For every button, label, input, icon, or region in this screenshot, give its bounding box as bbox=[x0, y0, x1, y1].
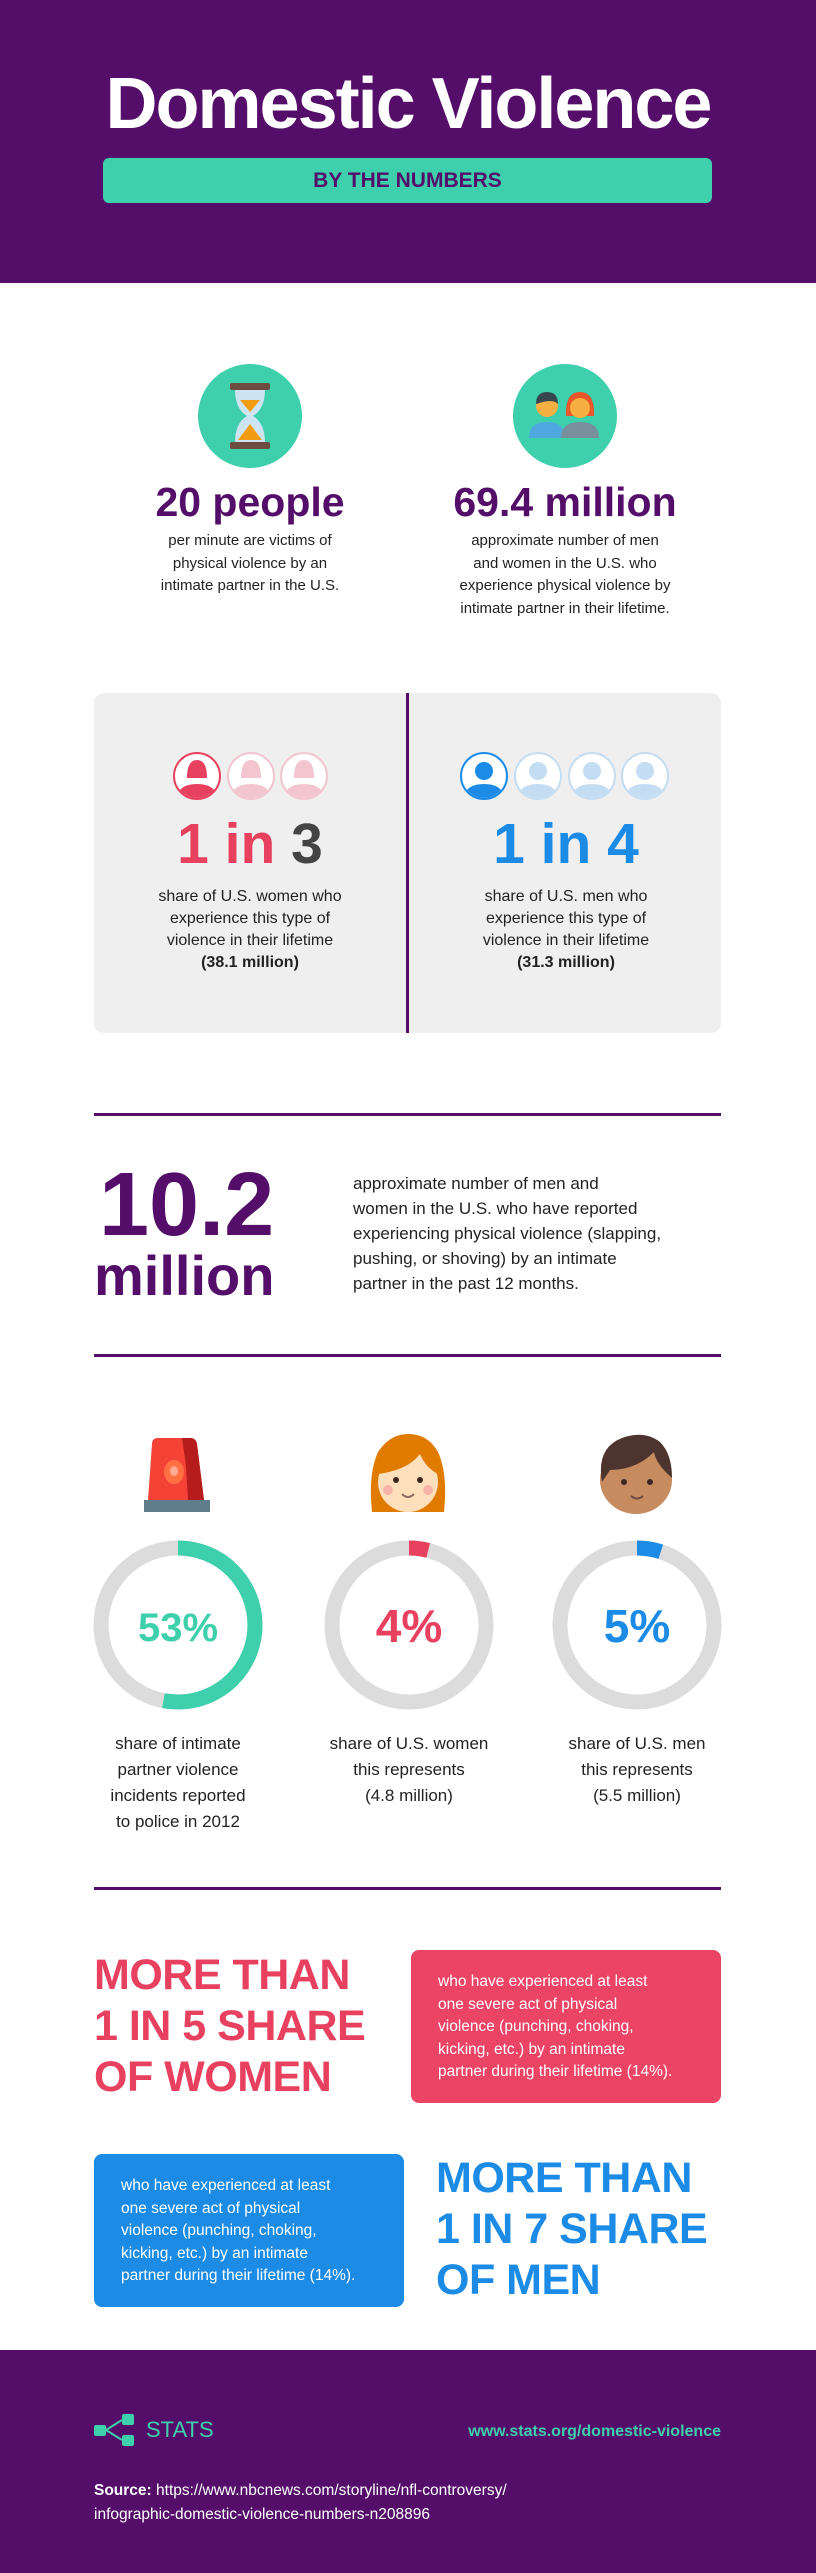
caption: 4%: share of U.S. women bbox=[330, 1734, 488, 1753]
header bbox=[0, 0, 816, 283]
logo: STATS bbox=[146, 2417, 214, 2442]
box: women: who have experienced at least bbox=[438, 1973, 647, 1990]
icons: women bbox=[173, 752, 328, 800]
big stat: 10.2 million: 10.2 bbox=[99, 1155, 274, 1255]
caption: 4%: (4.8 million) bbox=[365, 1786, 453, 1805]
stat: 20 people: intimate partner in the U.S. bbox=[161, 577, 339, 594]
caption: 53%: partner violence bbox=[118, 1760, 238, 1779]
source bbox=[94, 2482, 507, 2523]
box: women: violence (punching, choking, bbox=[438, 2018, 634, 2035]
big stat: 10.2 million bbox=[94, 1155, 274, 1307]
heading: men: MORE THAN bbox=[436, 2154, 692, 2202]
heading: men bbox=[436, 2154, 707, 2304]
url: www.stats.org/domestic-violence bbox=[468, 2423, 721, 2440]
stat: 20 people: per minute are victims of bbox=[168, 532, 332, 549]
women stat: share of U.S. women who bbox=[158, 888, 342, 905]
paragraph: 10.2 million bbox=[353, 1174, 661, 1293]
caption: 4%: this represents bbox=[353, 1760, 465, 1779]
donut: 5%: 5% bbox=[604, 1600, 670, 1652]
title: Domestic Violence bbox=[106, 64, 710, 144]
icon: man face bbox=[600, 1434, 672, 1514]
caption: 5%: this represents bbox=[581, 1760, 693, 1779]
source: infographic-domestic-violence-numbers-n208896 bbox=[94, 2506, 430, 2523]
caption: 5%: share of U.S. men bbox=[568, 1734, 706, 1753]
caption: 53%: incidents reported bbox=[110, 1786, 246, 1805]
logo bbox=[94, 2414, 214, 2446]
donut: 53% bbox=[94, 1540, 262, 1710]
men stat: 1 in 4 bbox=[493, 812, 639, 876]
stat: 20 people bbox=[155, 479, 345, 594]
box: women bbox=[411, 1950, 721, 2103]
women stat: experience this type of bbox=[170, 910, 330, 927]
paragraph: 10.2 million: experiencing physical violence (slapping, bbox=[353, 1224, 661, 1243]
box: men bbox=[94, 2154, 404, 2307]
stat: 69.4 million: approximate number of men bbox=[471, 532, 659, 549]
paragraph: 10.2 million: approximate number of men and bbox=[353, 1174, 599, 1193]
heading: women: MORE THAN bbox=[94, 1951, 350, 1999]
footer bbox=[0, 2350, 816, 2573]
heading: women bbox=[94, 1951, 365, 2101]
men stat: share of U.S. men who bbox=[485, 888, 647, 905]
stat: 69.4 million bbox=[453, 479, 677, 616]
box: men: kicking, etc.) by an intimate bbox=[121, 2244, 308, 2262]
stat: 69.4 million: and women in the U.S. who bbox=[473, 554, 657, 572]
women stat: violence in their lifetime bbox=[167, 932, 333, 949]
men stat bbox=[483, 812, 649, 971]
women stat bbox=[158, 812, 342, 971]
donut: 53%: 53% bbox=[138, 1606, 218, 1650]
big stat: 10.2 million: million bbox=[94, 1244, 274, 1307]
box: women: kicking, etc.) by an intimate bbox=[438, 2040, 625, 2058]
subtitle bar bbox=[103, 158, 712, 203]
caption: 53%: to police in 2012 bbox=[116, 1812, 240, 1831]
paragraph: 10.2 million: partner in the past 12 months. bbox=[353, 1274, 579, 1293]
heading: women: 1 IN 5 SHARE bbox=[94, 2002, 365, 2050]
paragraph: 10.2 million: pushing, or shoving) by an intimate bbox=[353, 1249, 617, 1268]
paragraph: 10.2 million: women in the U.S. who have reported bbox=[353, 1199, 637, 1218]
source: Source: https://www.nbcnews.com/storyline/nfl-controversy/ bbox=[94, 2482, 507, 2499]
women stat: (38.1 million) bbox=[201, 954, 299, 971]
stat: 20 people: 20 people bbox=[155, 479, 345, 525]
icon: couple bbox=[513, 364, 617, 468]
heading: men: OF MEN bbox=[436, 2256, 600, 2304]
heading: men: 1 IN 7 SHARE bbox=[436, 2205, 707, 2253]
stat: 69.4 million: experience physical violence by bbox=[460, 577, 670, 594]
icon: siren bbox=[144, 1438, 210, 1512]
icon: hourglass bbox=[198, 364, 302, 468]
box: women: one severe act of physical bbox=[438, 1996, 617, 2012]
caption: 53%: share of intimate bbox=[115, 1734, 241, 1753]
subtitle bar: BY THE NUMBERS bbox=[313, 169, 502, 192]
caption: 5%: (5.5 million) bbox=[593, 1786, 681, 1805]
box: men: partner during their lifetime (14%). bbox=[121, 2267, 355, 2284]
caption: 5% bbox=[568, 1734, 706, 1805]
heading: women: OF WOMEN bbox=[94, 2053, 331, 2101]
box: men: who have experienced at least bbox=[121, 2177, 330, 2194]
donut: 4%: 4% bbox=[376, 1600, 442, 1652]
donut: 5% bbox=[552, 1540, 722, 1710]
box: men: violence (punching, choking, bbox=[121, 2222, 317, 2239]
icon: woman face bbox=[370, 1434, 446, 1512]
men stat: experience this type of bbox=[486, 910, 646, 927]
stat: 20 people: physical violence by an bbox=[173, 554, 327, 572]
box: women: partner during their lifetime (14%). bbox=[438, 2063, 672, 2080]
stat: 69.4 million: intimate partner in their lifetime. bbox=[460, 600, 670, 616]
box: men: one severe act of physical bbox=[121, 2200, 300, 2216]
divider bbox=[406, 693, 409, 1033]
caption: 4% bbox=[330, 1734, 488, 1805]
icons: men bbox=[460, 752, 669, 800]
donut: 4% bbox=[324, 1540, 494, 1710]
stat: 69.4 million: 69.4 million bbox=[453, 479, 677, 525]
women stat: 1 in 3 bbox=[177, 812, 323, 876]
caption: 53% bbox=[110, 1734, 246, 1831]
men stat: violence in their lifetime bbox=[483, 932, 649, 949]
men stat: (31.3 million) bbox=[517, 954, 615, 971]
panel: 1 in 3 / 1 in 4 bbox=[94, 693, 721, 1033]
